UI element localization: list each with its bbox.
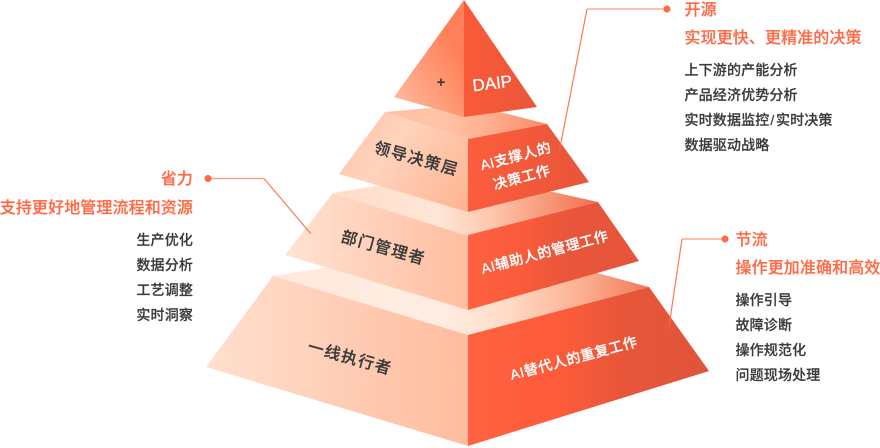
- text block: open source: [684, 1, 862, 153]
- tier 2: leadership: 决策工作: [491, 162, 552, 192]
- text block: throttling: 操作规范化: [736, 342, 806, 358]
- connector: open source: [558, 6, 670, 158]
- text block: throttling: 操作引导: [736, 292, 792, 308]
- pyramid: [206, 0, 709, 446]
- text block: cost saving: 数据分析: [136, 257, 193, 273]
- text block: throttling: [736, 231, 880, 383]
- text block: cost saving: 省力: [161, 170, 193, 188]
- tier 1: apex: [394, 0, 537, 117]
- text block: cost saving: 生产优化: [136, 232, 193, 248]
- text block: open source: 产品经济优势分析: [684, 87, 798, 103]
- tier 3: management: AI辅助人的管理工作: [479, 227, 610, 277]
- text block: cost saving: 实时洞察: [136, 307, 193, 323]
- tier 3: management: [285, 186, 639, 310]
- text block: throttling: 故障诊断: [736, 317, 792, 333]
- text block: open source: 数据驱动战略: [684, 137, 769, 153]
- connector: throttling: [668, 236, 728, 333]
- tier 2: leadership: AI支撑人的: [478, 139, 553, 173]
- text block: open source: 上下游的产能分析: [684, 62, 798, 78]
- tier 4: frontline: AI替代人的重复工作: [508, 333, 639, 383]
- tier 4: frontline: [206, 266, 709, 446]
- text block: open source: 实现更快、更精准的决策: [684, 28, 862, 47]
- text block: cost saving: [0, 170, 193, 323]
- tier 3: management: 部门管理者: [339, 227, 428, 268]
- tier 1: apex: DAIP: [471, 72, 513, 95]
- tier 2: leadership: 领导决策层: [372, 139, 461, 179]
- text block: cost saving: 工艺调整: [136, 282, 193, 298]
- text block: throttling: 问题现场处理: [736, 367, 820, 383]
- text block: cost saving: 支持更好地管理流程和资源: [0, 198, 193, 217]
- text block: throttling: 操作更加准确和高效: [736, 259, 880, 277]
- text block: open source: 开源: [684, 1, 717, 19]
- text block: throttling: 节流: [736, 231, 768, 249]
- connector: cost saving: [204, 175, 311, 234]
- tier 4: frontline: 一线执行者: [306, 338, 394, 378]
- tier 1: apex: +: [437, 74, 446, 91]
- tier 2: leadership: [339, 108, 589, 212]
- text block: open source: 实时数据监控/实时决策: [684, 112, 833, 128]
